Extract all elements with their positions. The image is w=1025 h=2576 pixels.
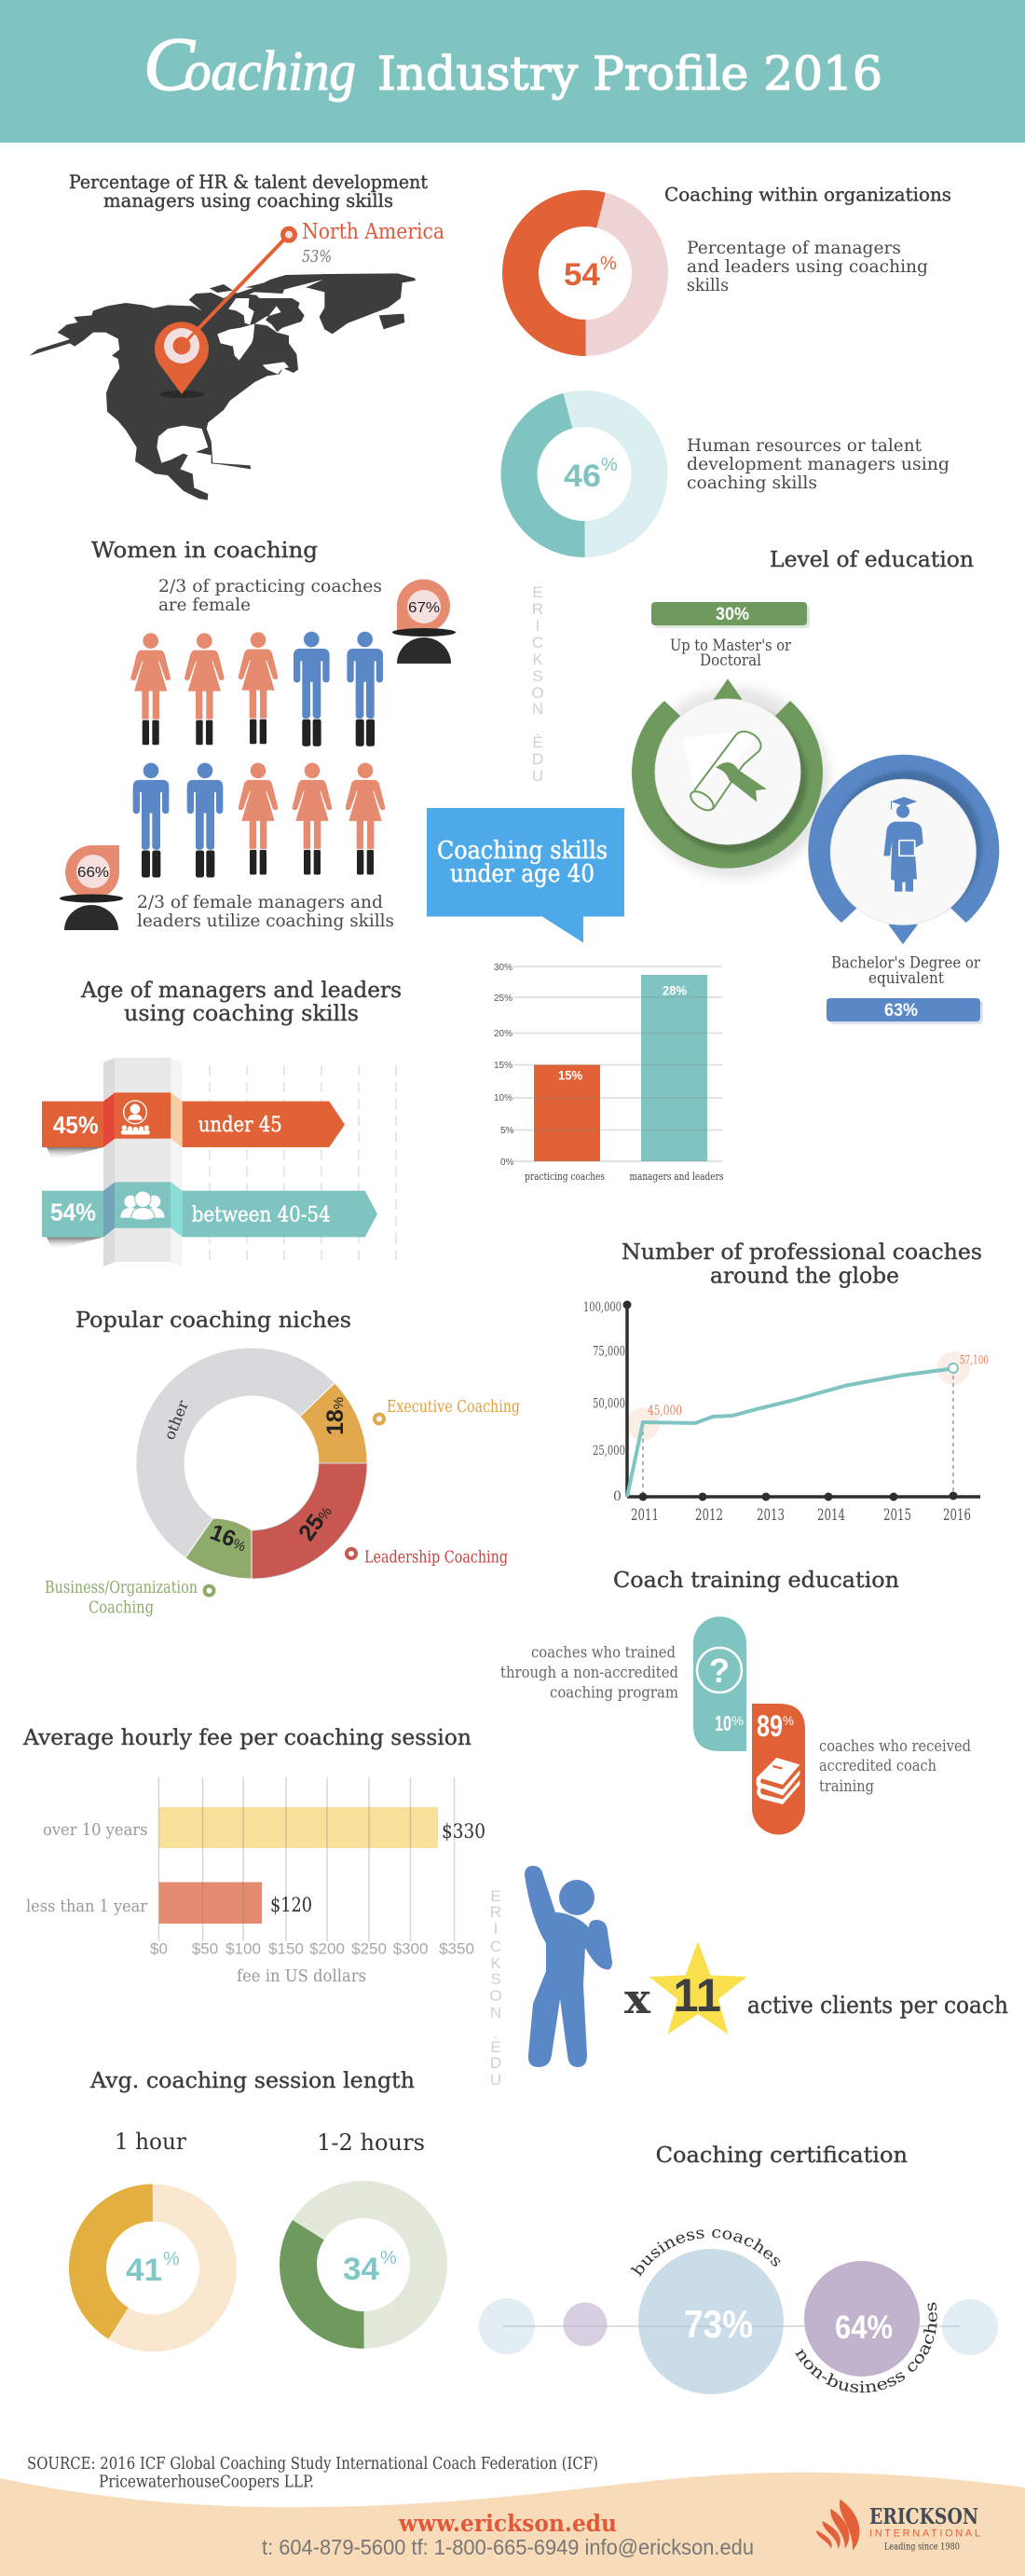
bar chart: 30%	[494, 963, 512, 973]
icon: graduate	[883, 797, 923, 892]
line chart: 2011	[631, 1506, 659, 1525]
text: non-accredited: coaching program	[550, 1683, 678, 1702]
footer contact	[262, 2510, 754, 2559]
footer contact: t: 604-879-5600 tf: 1-800-665-6949 info@erickson.edu	[262, 2535, 754, 2559]
donut 41 percent	[62, 2178, 243, 2358]
bar chart: 5%	[500, 1126, 514, 1136]
horizontal bar chart: $300	[393, 1940, 428, 1957]
footer wave	[0, 2473, 1025, 2576]
text: practicing coaches: 2/3 of practicing coaches	[158, 576, 382, 596]
donut chart: 16%	[207, 1520, 251, 1557]
panel: average hourly fee	[22, 1726, 485, 1986]
icon: group	[120, 1191, 165, 1220]
label: executive coaching: Executive Coaching	[387, 1398, 520, 1417]
curved label: business coaches: business coaches	[630, 2229, 781, 2277]
line chart: 25,000	[593, 1444, 625, 1459]
label: bachelor's: Bachelor's Degree or	[831, 954, 980, 971]
text: non-accredited: coaches who trained	[531, 1644, 676, 1661]
logo: Erickson International	[816, 2500, 980, 2553]
bar chart	[494, 963, 724, 1183]
star with 11: 11	[673, 1969, 721, 2021]
panel: active clients per coach	[525, 1866, 1008, 2067]
line chart: 2016	[943, 1506, 971, 1525]
logo: Erickson International: ERICKSON	[869, 2504, 978, 2529]
panel: number of professional coaches	[583, 1240, 989, 1525]
star with 11	[649, 1941, 747, 2035]
ribbon labels: under 45	[198, 1114, 282, 1137]
ribbon labels: 54%	[50, 1198, 96, 1226]
donut chart: 18%	[322, 1397, 348, 1435]
heading	[69, 171, 428, 212]
horizontal bar chart: $200	[309, 1940, 345, 1957]
heading: using coaching skills	[124, 1002, 359, 1026]
text: non-accredited	[500, 1644, 678, 1702]
horizontal bar chart: $0	[150, 1940, 168, 1957]
text: accredited	[819, 1737, 971, 1795]
panel: popular coaching niches	[45, 1309, 520, 1618]
teal pill: %	[731, 1713, 744, 1728]
bar chart: 15%	[558, 1068, 583, 1083]
label: bachelor's: equivalent	[868, 969, 944, 987]
heading: Coaching certification	[656, 2144, 908, 2168]
figures row 2	[133, 762, 385, 877]
line chart: 57,100	[960, 1354, 989, 1368]
panel: coach training education	[500, 1569, 971, 1834]
label: business organization coaching	[45, 1579, 214, 1618]
map of North America	[30, 273, 416, 500]
bar chart: 10%	[494, 1093, 512, 1103]
heading: Percentage of HR & talent development	[69, 171, 428, 193]
heading: Average hourly fee per coaching session	[22, 1726, 472, 1750]
label: bachelor's	[831, 954, 980, 987]
donut chart: other	[160, 1398, 192, 1442]
panel: level of education	[632, 548, 999, 1024]
line chart: 2013	[757, 1506, 785, 1525]
donut 46 percent: %	[601, 455, 618, 475]
teal pill	[693, 1616, 746, 1751]
title: Industry Profile 2016	[377, 47, 882, 101]
text: managers and leaders: and leaders using coaching	[687, 256, 928, 277]
label: 1-2 hours: 1-2 hours	[317, 2130, 425, 2156]
title: oaching	[184, 40, 356, 102]
bubbles	[479, 2249, 998, 2394]
bar 30 percent	[651, 602, 810, 628]
text: female managers: 2/3 of female managers and	[137, 892, 383, 912]
source text: SOURCE: 2016 ICF Global Coaching Study International Coach Federation (ICF)	[27, 2455, 598, 2473]
donut 34 percent: %	[380, 2248, 397, 2268]
horizontal bar chart: $250	[351, 1940, 387, 1957]
panel: age of managers and leaders	[42, 979, 402, 1267]
bar chart: 0%	[500, 1158, 514, 1168]
watermark: erickson.edu upper: ERICKSON.EDU	[531, 583, 544, 785]
North America label: North America	[302, 220, 444, 244]
header banner	[0, 0, 1025, 143]
figures row 1	[130, 632, 383, 747]
ribbon labels: 45%	[53, 1111, 99, 1139]
teal pill: ?	[709, 1651, 730, 1690]
ribbon chart	[42, 1058, 396, 1267]
icon: man with raised arm	[525, 1866, 612, 2067]
ribbon: under 45	[42, 1092, 345, 1147]
icon: books	[756, 1758, 800, 1804]
heading: Coach training education	[613, 1569, 899, 1593]
North America label: 53%	[302, 247, 332, 267]
line chart: 45,000	[648, 1404, 682, 1418]
label: 1 hour: 1 hour	[115, 2129, 187, 2155]
logo: Erickson International: INTERNATIONAL	[869, 2528, 980, 2540]
bar chart: 28%	[663, 983, 688, 998]
line chart: 2012	[695, 1506, 723, 1525]
horizontal bar chart: fee in US dollars	[237, 1967, 366, 1986]
horizontal bar chart: $100	[226, 1940, 261, 1957]
title: C	[144, 21, 196, 106]
horizontal bar chart: $350	[439, 1940, 474, 1957]
Greenland	[245, 273, 416, 334]
text: HR managers	[687, 435, 950, 493]
bar chart: managers and leaders	[630, 1171, 724, 1183]
line chart: 50,000	[593, 1396, 625, 1411]
speech bubble: Coaching skills	[437, 837, 608, 865]
speech bubble	[427, 808, 624, 943]
Hudson Bay	[217, 298, 289, 375]
marker 67 percent	[392, 580, 456, 664]
curved label: non-business coaches: non-business coaches	[795, 2302, 937, 2393]
heading: Women in coaching	[91, 539, 318, 563]
text: managers and leaders: Percentage of managers	[687, 238, 901, 258]
heading: Age of managers and leaders	[80, 979, 402, 1003]
text: non-accredited: through a non-accredited	[500, 1664, 678, 1681]
bar chart: 25%	[494, 993, 512, 1004]
horizontal bar chart: less than 1 year	[26, 1897, 147, 1916]
watermark: erickson.edu lower: ERICKSON.EDU	[489, 1887, 502, 2089]
title	[144, 21, 882, 106]
donut 54 percent	[520, 209, 650, 337]
marker 66 percent	[60, 845, 123, 930]
blue ring with graduate icon	[808, 755, 999, 944]
donut 46 percent: 46	[564, 459, 601, 494]
heading: Avg. coaching session length	[89, 2069, 415, 2093]
bar 63 percent: 63%	[884, 1001, 918, 1021]
Iceland	[379, 314, 404, 329]
orange pill	[752, 1704, 805, 1834]
marker 67 percent: 67%	[408, 600, 440, 616]
heading	[622, 1240, 982, 1288]
panel: coaching skills under age 40	[427, 808, 724, 1183]
text: managers and leaders	[687, 238, 928, 295]
horizontal bar chart: $120	[270, 1894, 312, 1916]
donut 46 percent	[519, 408, 649, 539]
horizontal bar chart: $50	[192, 1940, 218, 1957]
source text	[27, 2455, 598, 2492]
heading	[80, 979, 402, 1026]
North America label	[302, 220, 444, 267]
line chart	[583, 1300, 989, 1525]
label: master's or doctoral	[670, 637, 791, 669]
text: female managers	[137, 892, 394, 931]
label: business organization coaching: Coaching	[89, 1599, 154, 1618]
line chart: 2015	[883, 1506, 911, 1525]
horizontal bar chart: over 10 years	[43, 1820, 147, 1840]
panel: women in coaching	[60, 539, 456, 931]
multiplier x: x	[624, 1976, 651, 2023]
donut chart	[136, 1348, 367, 1579]
heading: Coaching within organizations	[664, 183, 951, 205]
orange pill: %	[783, 1713, 794, 1728]
donut chart: 25%	[294, 1500, 337, 1545]
green ring with diploma icon	[632, 678, 829, 878]
Baja	[117, 422, 127, 449]
ribbon: between 40-54	[42, 1182, 377, 1237]
line chart: 2014	[817, 1506, 845, 1525]
donut 54 percent: %	[600, 253, 617, 274]
panel: coaching certification	[479, 2144, 998, 2394]
bar 30 percent: 30%	[716, 605, 749, 624]
label: master's or doctoral: Up to Master's or	[670, 637, 791, 654]
line chart: 100,000	[583, 1300, 622, 1315]
text: active clients: active clients per coach	[747, 1992, 1008, 2019]
marker 66 percent: 66%	[77, 865, 109, 881]
text: female managers: leaders utilize coaching skills	[137, 911, 394, 931]
bar chart: practicing coaches	[525, 1171, 605, 1183]
ribbon labels	[50, 1111, 331, 1227]
horizontal bar chart	[26, 1777, 485, 1986]
text: accredited: accredited coach	[819, 1757, 936, 1774]
label: master's or doctoral: Doctoral	[700, 651, 761, 669]
donut 41 percent: 41	[126, 2253, 162, 2288]
line chart: 75,000	[593, 1344, 625, 1359]
bar chart: 20%	[494, 1029, 512, 1039]
line chart: 0	[613, 1489, 622, 1504]
text: HR managers: Human resources or talent	[687, 435, 922, 456]
footer contact: www.erickson.edu	[398, 2510, 617, 2537]
speech bubble: under age 40	[450, 860, 594, 888]
horizontal bar chart: $150	[268, 1940, 304, 1957]
icon: diploma	[683, 730, 764, 814]
bubbles: 64%	[835, 2309, 893, 2346]
bar 63 percent	[827, 998, 983, 1024]
text: HR managers: development managers using	[687, 454, 950, 474]
donut 54 percent: 54	[564, 257, 600, 293]
label: executive coaching	[375, 1398, 520, 1424]
source text: PricewaterhouseCoopers LLP.	[99, 2473, 314, 2492]
donut 41 percent: %	[163, 2249, 180, 2269]
heading: managers using coaching skills	[103, 189, 393, 212]
orange pill: 89	[757, 1709, 783, 1743]
panel: coaching within organizations	[519, 183, 951, 539]
panel: HR and talent development map	[30, 171, 444, 500]
ribbon labels: between 40-54	[192, 1204, 331, 1227]
icon: person with group	[121, 1101, 150, 1134]
heading: Popular coaching niches	[75, 1309, 351, 1333]
text: accredited: training	[819, 1777, 874, 1795]
label: business organization coaching: Business/Organization	[45, 1579, 198, 1597]
donut 34 percent: 34	[343, 2252, 379, 2287]
teal pill: 10	[715, 1711, 731, 1735]
horizontal bar chart: $330	[442, 1820, 485, 1843]
logo: Erickson International: Leading since 1980	[884, 2542, 960, 2553]
donut 34 percent	[298, 2199, 429, 2330]
bubbles: 73%	[684, 2302, 753, 2346]
text: accredited: coaches who received	[819, 1737, 971, 1755]
text: practicing coaches: are female	[158, 595, 251, 615]
map pin	[155, 228, 294, 398]
text: managers and leaders: skills	[687, 275, 729, 295]
text: HR managers: coaching skills	[687, 473, 817, 493]
text: practicing coaches	[158, 576, 382, 615]
label: leadership coaching: Leadership Coaching	[364, 1549, 508, 1568]
heading: around the globe	[710, 1264, 899, 1288]
bar chart: 15%	[494, 1061, 512, 1071]
heading: Number of professional coaches	[622, 1240, 982, 1265]
heading: Level of education	[770, 548, 974, 572]
icon: flame	[816, 2500, 860, 2551]
panel: avg coaching session length	[62, 2069, 429, 2358]
